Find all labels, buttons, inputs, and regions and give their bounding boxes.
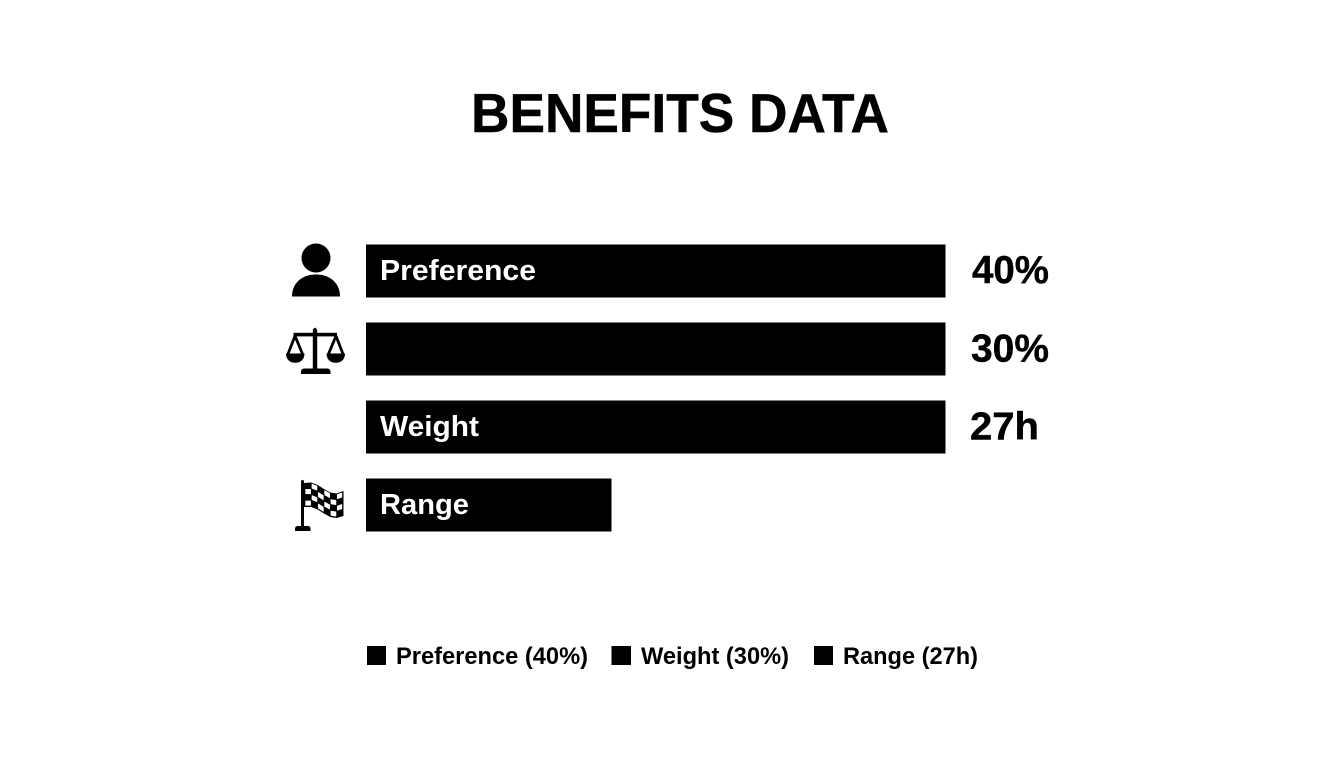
legend item: range: Range (27h)	[843, 643, 978, 670]
bar: preference: Preference	[380, 255, 536, 287]
bar chart	[286, 244, 1049, 532]
bar: range: Range	[380, 489, 469, 521]
legend item: weight: Weight (30%)	[641, 643, 789, 670]
icon: checkered flag	[295, 480, 344, 531]
bar: range	[366, 478, 612, 532]
title: BENEFITS DATA	[471, 82, 889, 144]
bar: weight: Weight	[380, 411, 479, 443]
value: 27h: 27h	[970, 406, 1039, 448]
bar: unlabelled	[366, 322, 946, 376]
bar: preference	[366, 244, 946, 298]
value: 40%: 40%	[972, 249, 1049, 292]
legend	[367, 643, 978, 670]
bar: weight	[366, 400, 946, 454]
legend item: preference: Preference (40%)	[396, 643, 588, 670]
icon: scales	[286, 328, 345, 374]
value: 30%: 30%	[971, 328, 1049, 370]
icon: person	[292, 244, 340, 296]
